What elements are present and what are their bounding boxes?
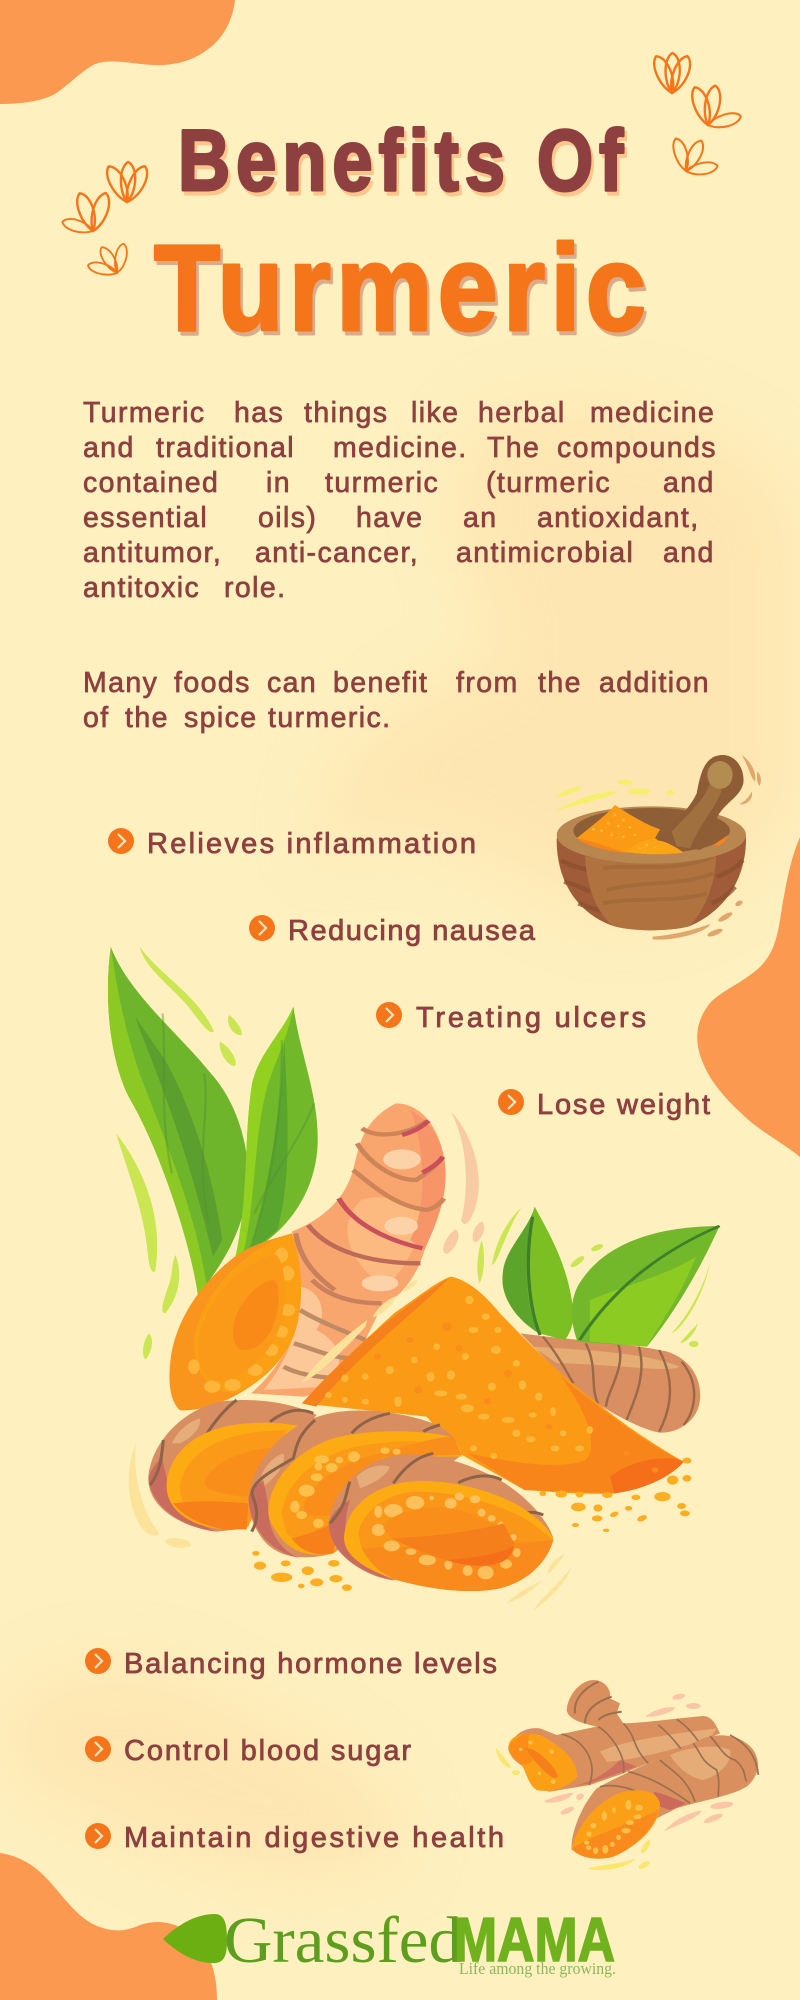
text block: intro paragraph: medicine. xyxy=(333,432,468,464)
logo: Grassfed Mama: Life among the growing. xyxy=(459,1959,616,1978)
title: Turmeric: Turmeric xyxy=(154,219,646,357)
bullet: Reducing nausea: Reducing nausea xyxy=(288,915,536,947)
text block: intro paragraph: role. xyxy=(224,572,286,604)
cut faces xyxy=(508,1734,577,1791)
bullet: Lose weight: Lose weight xyxy=(537,1089,710,1121)
back root xyxy=(510,1680,720,1792)
bullet: Control blood sugar: Control blood sugar xyxy=(124,1735,411,1767)
text block: intro paragraph: The xyxy=(487,432,540,464)
text block: intro paragraph: and xyxy=(663,537,715,569)
text block: intro paragraph: and xyxy=(83,432,135,464)
bullet: Treating ulcers: Treating ulcers xyxy=(416,1002,646,1034)
powder pile xyxy=(302,1277,684,1494)
text block: second paragraph: Many xyxy=(83,667,158,699)
illustration: three turmeric slices xyxy=(148,1400,553,1591)
text block: intro paragraph: contained xyxy=(83,467,219,499)
text block: second paragraph xyxy=(83,667,710,734)
back root xyxy=(520,1333,700,1433)
logo: Grassfed Mama: Grassfed xyxy=(224,1904,462,1977)
title decoration: left sprouts xyxy=(61,162,152,278)
text block: second paragraph: of xyxy=(83,702,110,734)
bullet: Maintain digestive health: Maintain digestive health xyxy=(124,1822,504,1854)
text block: intro paragraph: compounds xyxy=(557,432,717,464)
text block: intro paragraph: things xyxy=(304,397,388,429)
text block: second paragraph: spice xyxy=(184,702,258,734)
front root xyxy=(572,1735,758,1857)
powder grains xyxy=(252,1458,691,1591)
text block: intro paragraph: has xyxy=(234,397,284,429)
text block: intro paragraph: oils) xyxy=(258,502,317,534)
icon: mortar and pestle xyxy=(554,755,761,940)
right leaves xyxy=(502,1207,573,1340)
illustration: turmeric roots and powder xyxy=(116,1103,720,1610)
upright root xyxy=(251,1103,446,1397)
text block: intro paragraph: and xyxy=(663,467,715,499)
text block: intro paragraph: antitumor, xyxy=(83,537,222,569)
logo: Grassfed Mama: MAMA xyxy=(454,1906,615,1975)
text block: second paragraph: the xyxy=(125,702,169,734)
text block: intro paragraph: antitoxic xyxy=(83,572,200,604)
text block: intro paragraph: have xyxy=(356,502,423,534)
text block: intro paragraph: herbal xyxy=(478,397,566,429)
text block: second paragraph: turmeric. xyxy=(268,702,391,734)
text block: intro paragraph: medicine xyxy=(590,397,715,429)
blob: top-left corner xyxy=(0,0,235,104)
text block: second paragraph: the xyxy=(538,667,582,699)
text block: intro paragraph: like xyxy=(411,397,459,429)
text block: intro paragraph: antimicrobial xyxy=(456,537,634,569)
text block: second paragraph: foods xyxy=(174,667,251,699)
bullet: Balancing hormone levels: Balancing hormone levels xyxy=(124,1648,497,1680)
text block: intro paragraph: Turmeric xyxy=(83,397,206,429)
bullet: Relieves inflammation: Relieves inflammation xyxy=(147,828,476,860)
title decoration: right sprouts xyxy=(650,53,742,177)
text block: intro paragraph: antioxidant, xyxy=(537,502,700,534)
blob: right edge xyxy=(697,837,800,1157)
text block: second paragraph: benefit xyxy=(333,667,428,699)
text block: intro paragraph xyxy=(83,397,717,604)
slice 3 xyxy=(328,1454,553,1580)
text block: intro paragraph: anti-cancer, xyxy=(255,537,419,569)
illustration: small turmeric roots xyxy=(496,1680,758,1870)
logo leaf xyxy=(163,1914,227,1963)
cut face xyxy=(169,1233,301,1410)
text block: second paragraph: from xyxy=(456,667,519,699)
blob: bottom-left corner xyxy=(0,1853,217,2000)
text block: intro paragraph: essential xyxy=(83,502,208,534)
logo: Grassfed Mama xyxy=(163,1904,616,1978)
text block: intro paragraph: in xyxy=(266,467,291,499)
text block: intro paragraph: traditional xyxy=(156,432,295,464)
text block: intro paragraph: an xyxy=(463,502,498,534)
text block: second paragraph: can xyxy=(267,667,317,699)
text block: intro paragraph: (turmeric xyxy=(486,467,611,499)
slice 2 xyxy=(248,1411,462,1557)
title: Benefits Of: Benefits Of xyxy=(178,112,624,208)
slice 1 xyxy=(148,1400,317,1532)
text block: intro paragraph: turmeric xyxy=(325,467,439,499)
text block: second paragraph: addition xyxy=(599,667,710,699)
cream streaks xyxy=(302,1280,418,1383)
illustration: big green leaves xyxy=(108,947,318,1295)
